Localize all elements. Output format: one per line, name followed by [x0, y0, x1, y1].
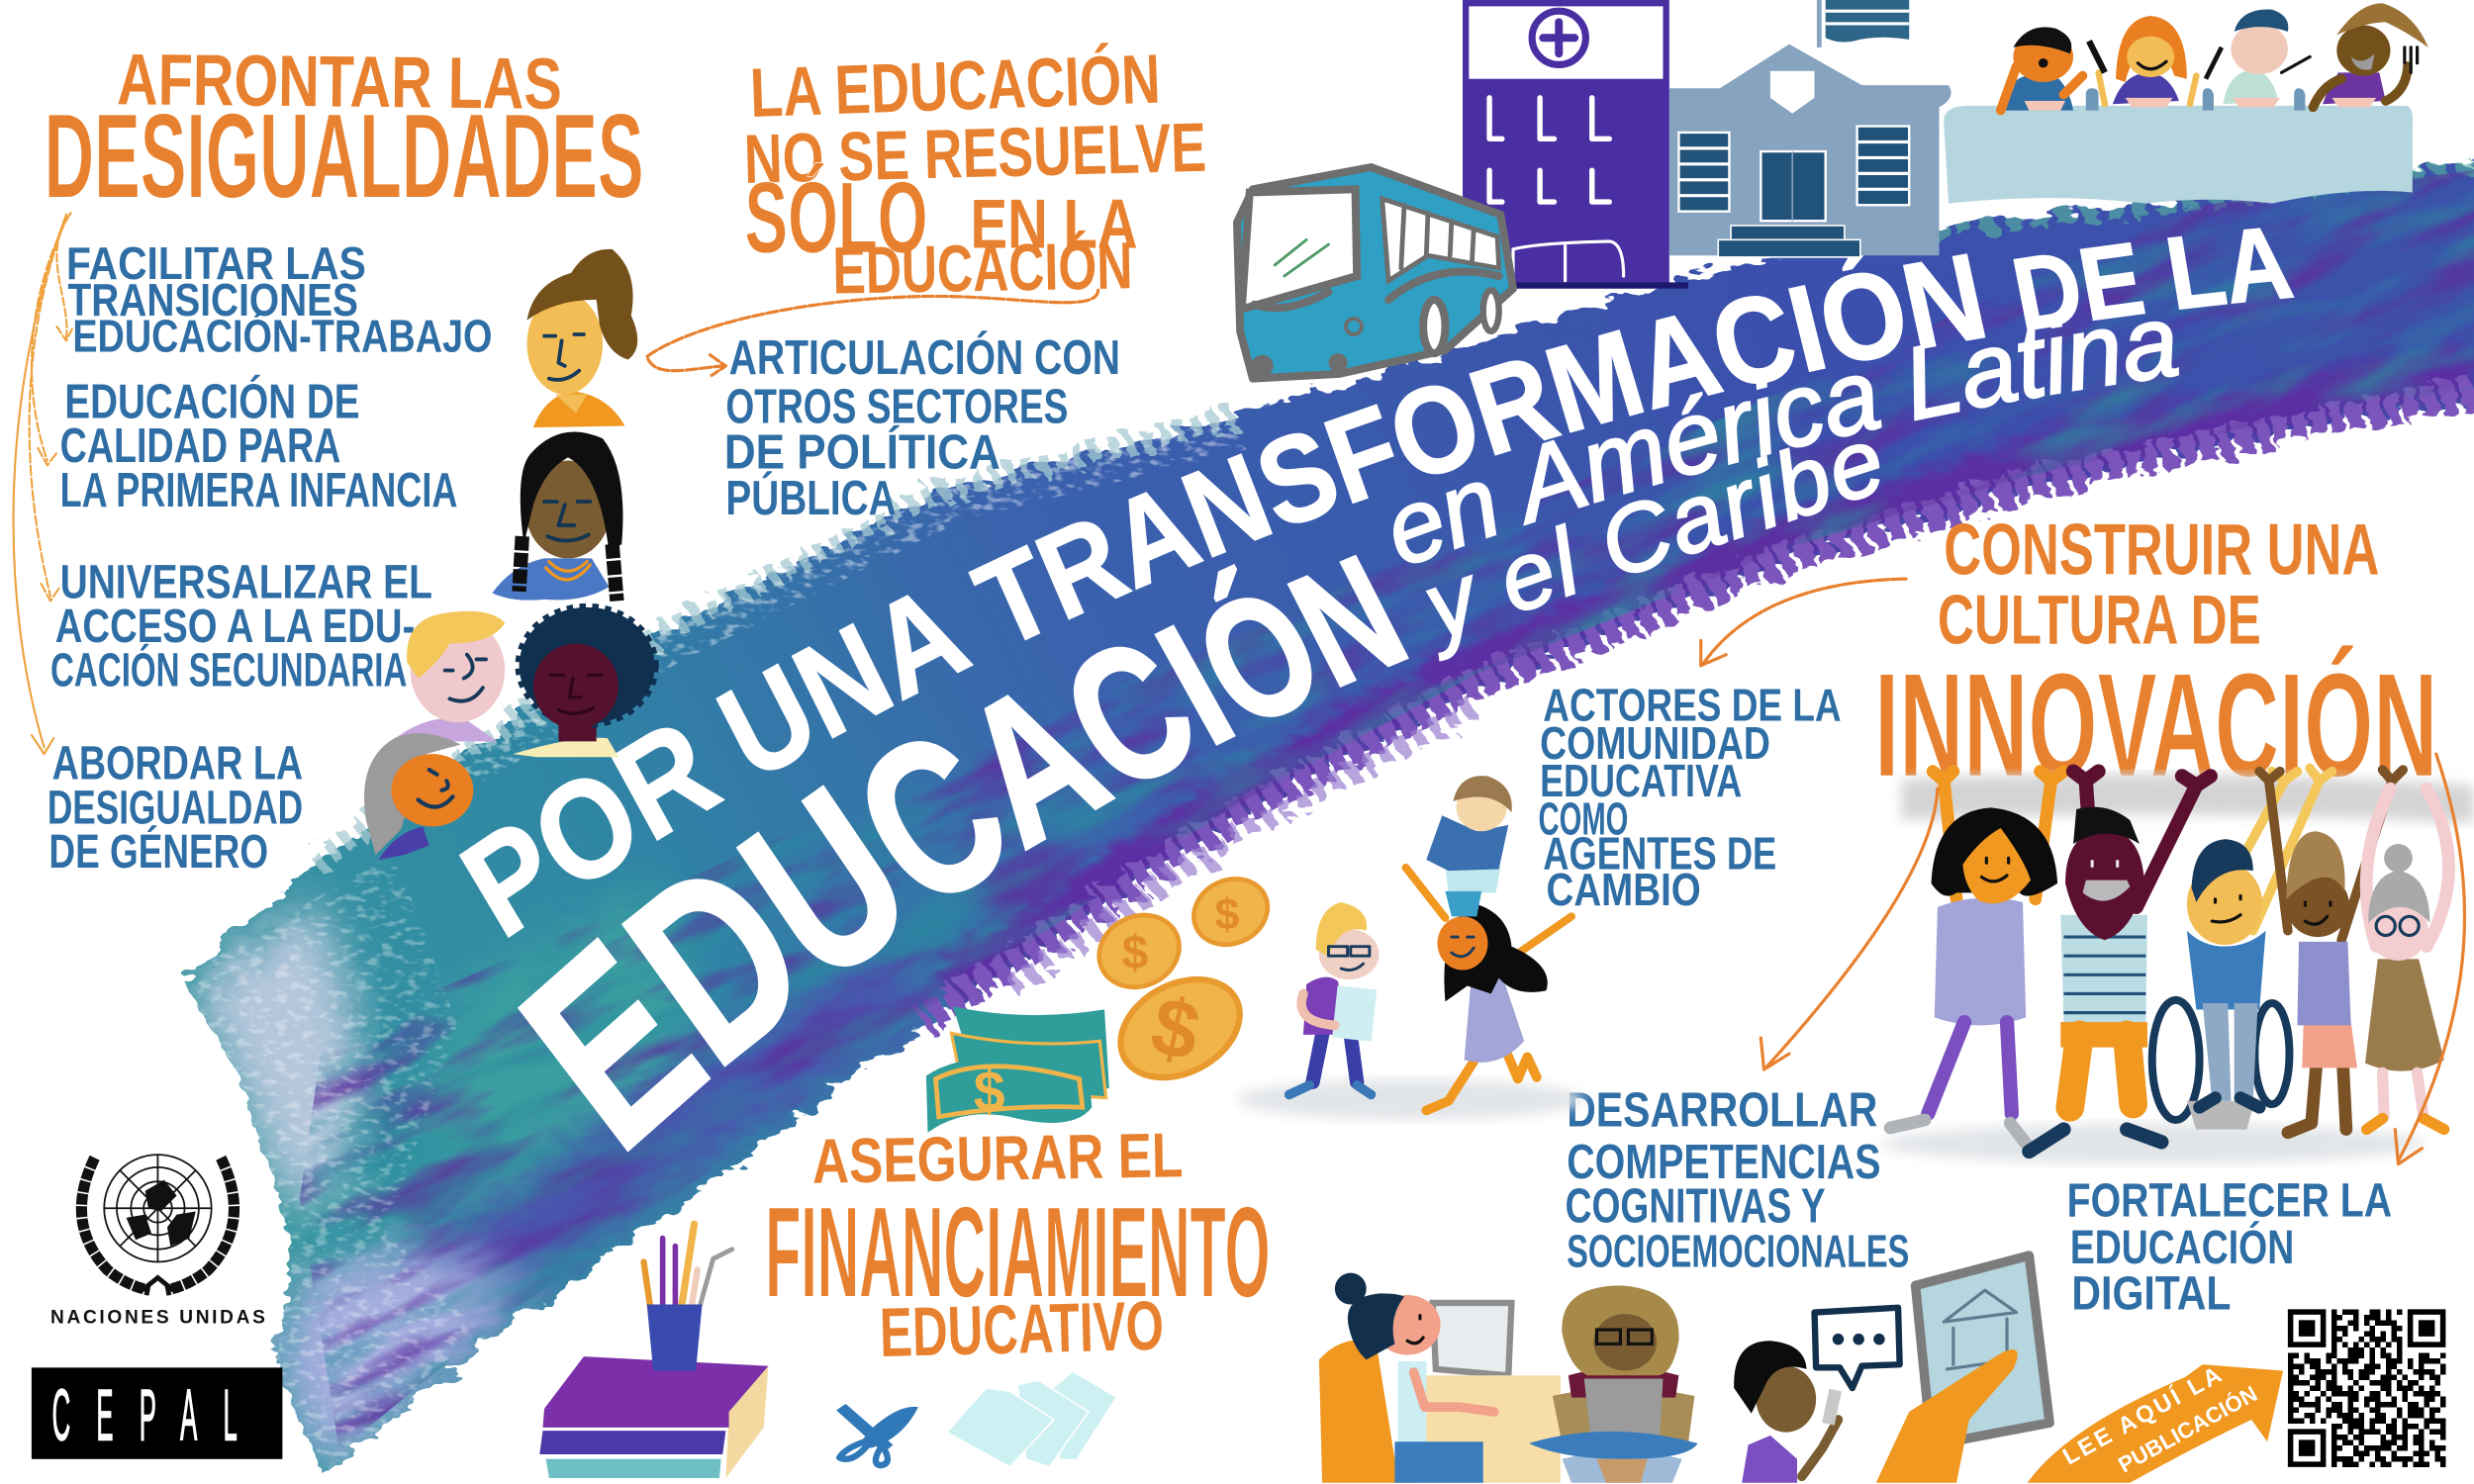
text block: articulación: ARTICULACIÓN CON — [729, 329, 1120, 385]
text block: desigualdades items: CACIÓN SECUNDARIA — [50, 643, 407, 697]
heading: la educación no se resuelve sólo — [743, 40, 1207, 309]
arrow: innovación to competencias — [1760, 788, 1938, 1069]
text block: desarrollar competencias: DESARROLLAR — [1567, 1082, 1877, 1137]
text block: actores: EDUCATIVA — [1540, 755, 1742, 806]
icon: blond man — [391, 611, 505, 741]
icon: grey-haired person — [364, 733, 473, 860]
heading: asegurar el financiamiento educativo: EDUCATIVO — [879, 1286, 1165, 1371]
text: FINANCIAMIENTO — [765, 1180, 1270, 1325]
heading: la educación no se resuelve sólo: EDUCACIÓN — [832, 229, 1133, 309]
heading: asegurar el financiamiento educativo — [765, 1119, 1270, 1371]
icon: shadow under innovación — [1901, 775, 2474, 823]
logo: CEPAL: CEPAL — [52, 1374, 263, 1456]
text block: fortalecer educación digital: DIGITAL — [2071, 1267, 2231, 1320]
arrow: dashed to articulación — [647, 290, 1098, 375]
text block: desigualdades items: CALIDAD PARA — [60, 418, 340, 473]
icon: school building — [1669, 0, 1951, 257]
icon: UN emblem — [81, 1155, 235, 1290]
icon: banknotes: $ — [974, 1060, 1005, 1123]
icon: woman with braids — [492, 431, 622, 601]
heading: afrontar las desigualdades: DESIGUALDADES — [45, 88, 644, 223]
title: Por una transformación de la educación: y el Caribe — [1425, 443, 1880, 661]
heading: afrontar las desigualdades — [45, 39, 644, 223]
heading: la educación no se resuelve sólo: SÓLO — [745, 161, 928, 274]
text block: fortalecer educación digital: FORTALECER LA — [2067, 1174, 2392, 1227]
heading: construir una cultura de innovación — [1874, 509, 2437, 807]
arrow: innovación to educación digital — [2395, 754, 2465, 1164]
icon: scissors — [836, 1404, 918, 1465]
text block: desigualdades items: DE GÉNERO — [48, 825, 268, 879]
label: Naciones Unidas: NACIONES UNIDAS — [50, 1308, 265, 1329]
icon: banknotes — [926, 1006, 1109, 1133]
icon: coins: $ — [1215, 890, 1240, 939]
title: Por una transformación de la educación: en América Latina — [1393, 321, 2179, 564]
heading: la educación no se resuelve sólo: EN LA — [971, 184, 1138, 262]
text block: desarrollar competencias: COMPETENCIAS — [1567, 1135, 1881, 1189]
heading: construir una cultura de innovación: CULTURA DE — [1938, 581, 2261, 659]
text block: desarrollar competencias: COGNITIVAS Y — [1566, 1179, 1826, 1234]
text block: actores: COMUNIDAD — [1540, 717, 1770, 769]
scene: children with books — [1237, 776, 1584, 1120]
text block: desigualdades items: DESIGUALDAD — [48, 782, 303, 834]
heading: asegurar el financiamiento educativo: ASEGURAR EL — [811, 1119, 1184, 1197]
text block: desigualdades items: EDUCACIÓN-TRABAJO — [72, 311, 492, 362]
text block: desarrollar competencias: SOCIOEMOCIONALES — [1567, 1225, 1909, 1276]
text block: desarrollar competencias — [1566, 1082, 1909, 1276]
text block: articulación: OTROS SECTORES — [725, 379, 1068, 433]
QR code — [2288, 1309, 2445, 1467]
icon: curly-haired woman — [513, 607, 655, 757]
heading: la educación no se resuelve sólo: NO SE RESUELVE — [743, 108, 1207, 198]
icon: coins: $ — [1144, 978, 1207, 1078]
text block: fortalecer educación digital: EDUCACIÓN — [2070, 1220, 2294, 1274]
arrow: lee aquí la publicación: PUBLICACIÓN — [2114, 1381, 2261, 1478]
text block: actores: AGENTES DE — [1543, 828, 1776, 880]
arrow: lee aquí la publicación: LEE AQUÍ LA — [2058, 1360, 2226, 1470]
text block: desigualdades items: ABORDAR LA — [52, 738, 303, 790]
icon: coins: $ — [1122, 927, 1148, 979]
icon: tablet with hand — [1876, 1255, 2049, 1483]
text block: articulación — [724, 329, 1120, 525]
text block: actores — [1539, 680, 1842, 915]
heading: afrontar las desigualdades: AFRONTAR LAS — [117, 39, 562, 125]
arrow: construir to actores — [1701, 579, 1906, 666]
text block: fortalecer educación digital — [2067, 1174, 2392, 1320]
text block: desigualdades items: EDUCACIÓN DE — [64, 374, 360, 429]
icon: books and pencil cup — [539, 1224, 768, 1478]
text block: desigualdades items: TRANSICIONES — [68, 274, 358, 325]
text block: articulación: PÚBLICA — [725, 470, 897, 525]
text block: actores: COMO — [1539, 792, 1628, 844]
text block: desigualdades items: FACILITAR LAS — [66, 237, 366, 289]
title: Por una transformación de la educación: EDUCACIÓN — [518, 554, 1409, 1153]
text block: articulación: DE POLÍTICA — [724, 424, 1000, 480]
text block: desigualdades items — [48, 237, 492, 879]
icon: coins — [1088, 867, 1279, 1097]
arrows: desigualdades dashed — [14, 213, 72, 754]
icon: paper sheets — [947, 1372, 1115, 1467]
text block: desigualdades items: LA PRIMERA INFANCIA — [60, 463, 457, 517]
text block: actores: ACTORES DE LA — [1543, 680, 1842, 731]
title: Por una transformación de la educación: POR UNA TRANSFORMACIÓN DE LA — [459, 228, 2295, 938]
icon: woman with ponytail — [527, 249, 637, 427]
text block: actores: CAMBIO — [1546, 864, 1701, 915]
text block: desigualdades items: ACCESO A LA EDU- — [55, 601, 415, 653]
icon: children eating at table — [1944, 3, 2428, 204]
arrow: lee aquí la publicación — [2028, 1360, 2283, 1483]
scene: people lifting innovación — [1882, 768, 2448, 1164]
heading: la educación no se resuelve sólo: LA EDUCACIÓN — [749, 40, 1162, 132]
icon: hospital — [1460, 3, 1688, 286]
text block: desigualdades items: UNIVERSALIZAR EL — [60, 556, 432, 608]
scene: students with devices — [1319, 1273, 1900, 1483]
icon: bus — [1237, 167, 1513, 379]
